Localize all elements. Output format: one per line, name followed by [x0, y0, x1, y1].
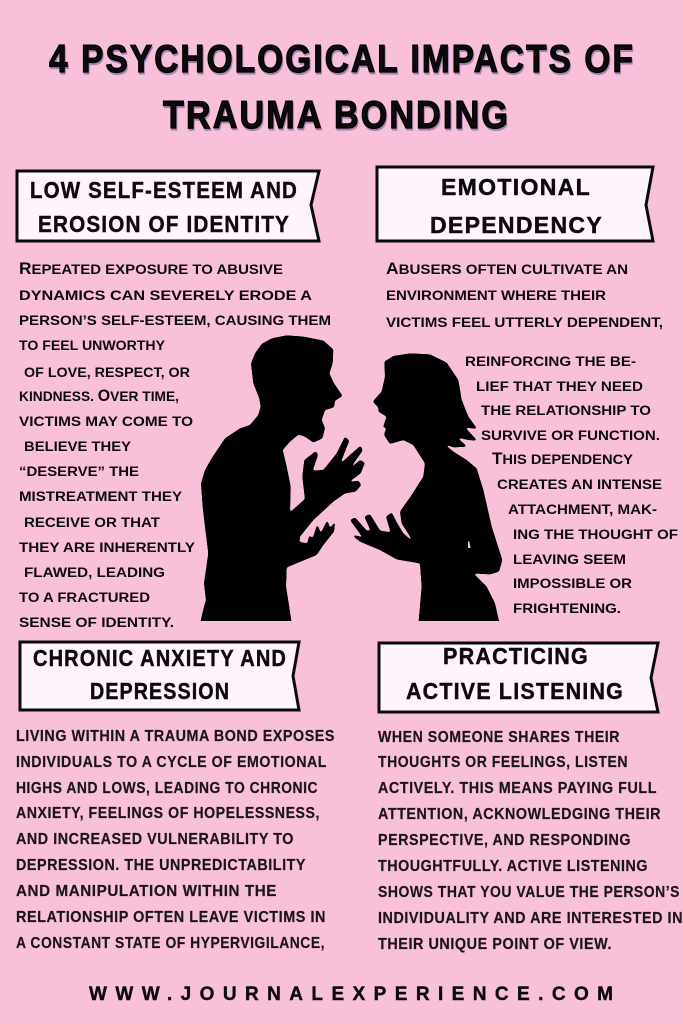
body text: active listening: WHEN SOMEONE SHARES THEIR: [378, 729, 620, 746]
body text: active listening: THOUGHTS OR FEELINGS, LISTEN: [378, 754, 628, 771]
body text: low self-esteem: MISTREATMENT THEY: [19, 489, 183, 505]
body text: low self-esteem: [19, 260, 331, 631]
body text: chronic anxiety: RELATIONSHIP OFTEN LEAVE VICTIMS IN: [16, 909, 326, 926]
heading banner: active listening: PRACTICING: [443, 643, 589, 669]
panel: chronic anxiety and depression: [16, 642, 335, 952]
body text: chronic anxiety: AND MANIPULATION WITHIN THE: [16, 883, 277, 900]
body text: low self-esteem: PERSON’S SELF-ESTEEM, CAUSING THEM: [19, 313, 331, 329]
body text: low self-esteem: BELIEVE THEY: [24, 439, 132, 455]
panel: low self-esteem: [17, 171, 331, 631]
body text: low self-esteem: REPEATED EXPOSURE TO ABUSIVE: [19, 260, 283, 278]
body text: active listening: [378, 729, 683, 953]
heading banner: low self-esteem: LOW SELF-ESTEEM AND: [30, 177, 298, 203]
body text: emotional dependency: THE RELATIONSHIP TO: [481, 403, 651, 419]
heading banner: low self-esteem: [17, 171, 319, 241]
body text: chronic anxiety: INDIVIDUALS TO A CYCLE OF EMOTIONAL: [16, 754, 327, 771]
body text: low self-esteem: DYNAMICS CAN SEVERELY ERODE A: [19, 288, 312, 304]
body text: low self-esteem: TO FEEL UNWORTHY: [19, 338, 166, 354]
heading banner: active listening: [379, 643, 658, 712]
body text: emotional dependency: [386, 260, 678, 617]
body text: active listening: PERSPECTIVE, AND RESPONDING: [378, 832, 631, 849]
body text: chronic anxiety: DEPRESSION. THE UNPREDICTABILITY: [16, 857, 306, 874]
body text: emotional dependency: REINFORCING THE BE-: [465, 354, 636, 370]
body text: chronic anxiety: AND INCREASED VULNERABILITY TO: [16, 831, 294, 848]
body text: emotional dependency: LIEF THAT THEY NEED: [476, 379, 643, 395]
body text: emotional dependency: ENVIRONMENT WHERE THEIR: [386, 288, 606, 304]
body text: active listening: ATTENTION, ACKNOWLEDGING THEIR: [378, 806, 661, 823]
title: TRAUMA BONDING: [163, 94, 510, 137]
body text: low self-esteem: RECEIVE OR THAT: [24, 515, 160, 531]
body text: low self-esteem: TO A FRACTURED: [19, 590, 150, 606]
body text: low self-esteem: “DESERVE” THE: [19, 464, 139, 480]
body text: chronic anxiety: [16, 728, 335, 952]
body text: emotional dependency: IMPOSSIBLE OR: [513, 576, 632, 592]
body text: emotional dependency: VICTIMS FEEL UTTERLY DEPENDENT,: [386, 315, 663, 331]
body text: low self-esteem: FLAWED, LEADING: [24, 565, 165, 581]
heading banner: chronic anxiety: CHRONIC ANXIETY AND: [33, 645, 287, 671]
body text: chronic anxiety: ANXIETY, FEELINGS OF HOPELESSNESS,: [16, 805, 320, 822]
heading banner: chronic anxiety: DEPRESSION: [90, 678, 230, 704]
heading banner: chronic anxiety: [20, 642, 299, 710]
heading banner: emotional dependency: DEPENDENCY: [430, 212, 603, 238]
body text: emotional dependency: ABUSERS OFTEN CULTIVATE AN: [386, 260, 628, 278]
body text: chronic anxiety: A CONSTANT STATE OF HYPERVIGILANCE,: [16, 935, 325, 952]
silhouette: arguing man: [198, 335, 365, 640]
body text: emotional dependency: ING THE THOUGHT OF: [513, 527, 678, 543]
body text: low self-esteem: KINDNESS. OVER TIME,: [19, 387, 179, 405]
body text: active listening: THOUGHTFULLY. ACTIVE LISTENING: [378, 858, 648, 875]
heading banner: active listening: ACTIVE LISTENING: [406, 678, 624, 704]
body text: emotional dependency: SURVIVE OR FUNCTION.: [481, 428, 660, 444]
body text: emotional dependency: FRIGHTENING.: [513, 601, 621, 617]
body text: emotional dependency: THIS DEPENDENCY: [492, 450, 634, 468]
body text: active listening: THEIR UNIQUE POINT OF VIEW.: [378, 936, 612, 953]
body text: low self-esteem: VICTIMS MAY COME TO: [19, 414, 193, 430]
body text: chronic anxiety: LIVING WITHIN A TRAUMA BOND EXPOSES: [16, 728, 335, 745]
body text: low self-esteem: SENSE OF IDENTITY.: [19, 615, 174, 631]
silhouette: arguing woman: [350, 353, 502, 640]
body text: emotional dependency: ATTACHMENT, MAK-: [508, 502, 657, 518]
footer website: WWW.JOURNALEXPERIENCE.COM: [89, 984, 613, 1005]
panel: emotional dependency: [377, 167, 678, 617]
title: [49, 38, 635, 137]
body text: emotional dependency: LEAVING SEEM: [513, 552, 626, 568]
heading banner: low self-esteem: EROSION OF IDENTITY: [38, 211, 290, 237]
heading banner: emotional dependency: [377, 167, 653, 241]
body text: low self-esteem: THEY ARE INHERENTLY: [19, 540, 196, 556]
heading banner: emotional dependency: EMOTIONAL: [441, 174, 591, 200]
body text: emotional dependency: CREATES AN INTENSE: [497, 477, 662, 493]
body text: chronic anxiety: HIGHS AND LOWS, LEADING TO CHRONIC: [16, 780, 318, 797]
body text: active listening: ACTIVELY. THIS MEANS PAYING FULL: [378, 780, 657, 797]
body text: low self-esteem: OF LOVE, RESPECT, OR: [24, 365, 190, 381]
panel: practicing active listening: [378, 643, 683, 953]
